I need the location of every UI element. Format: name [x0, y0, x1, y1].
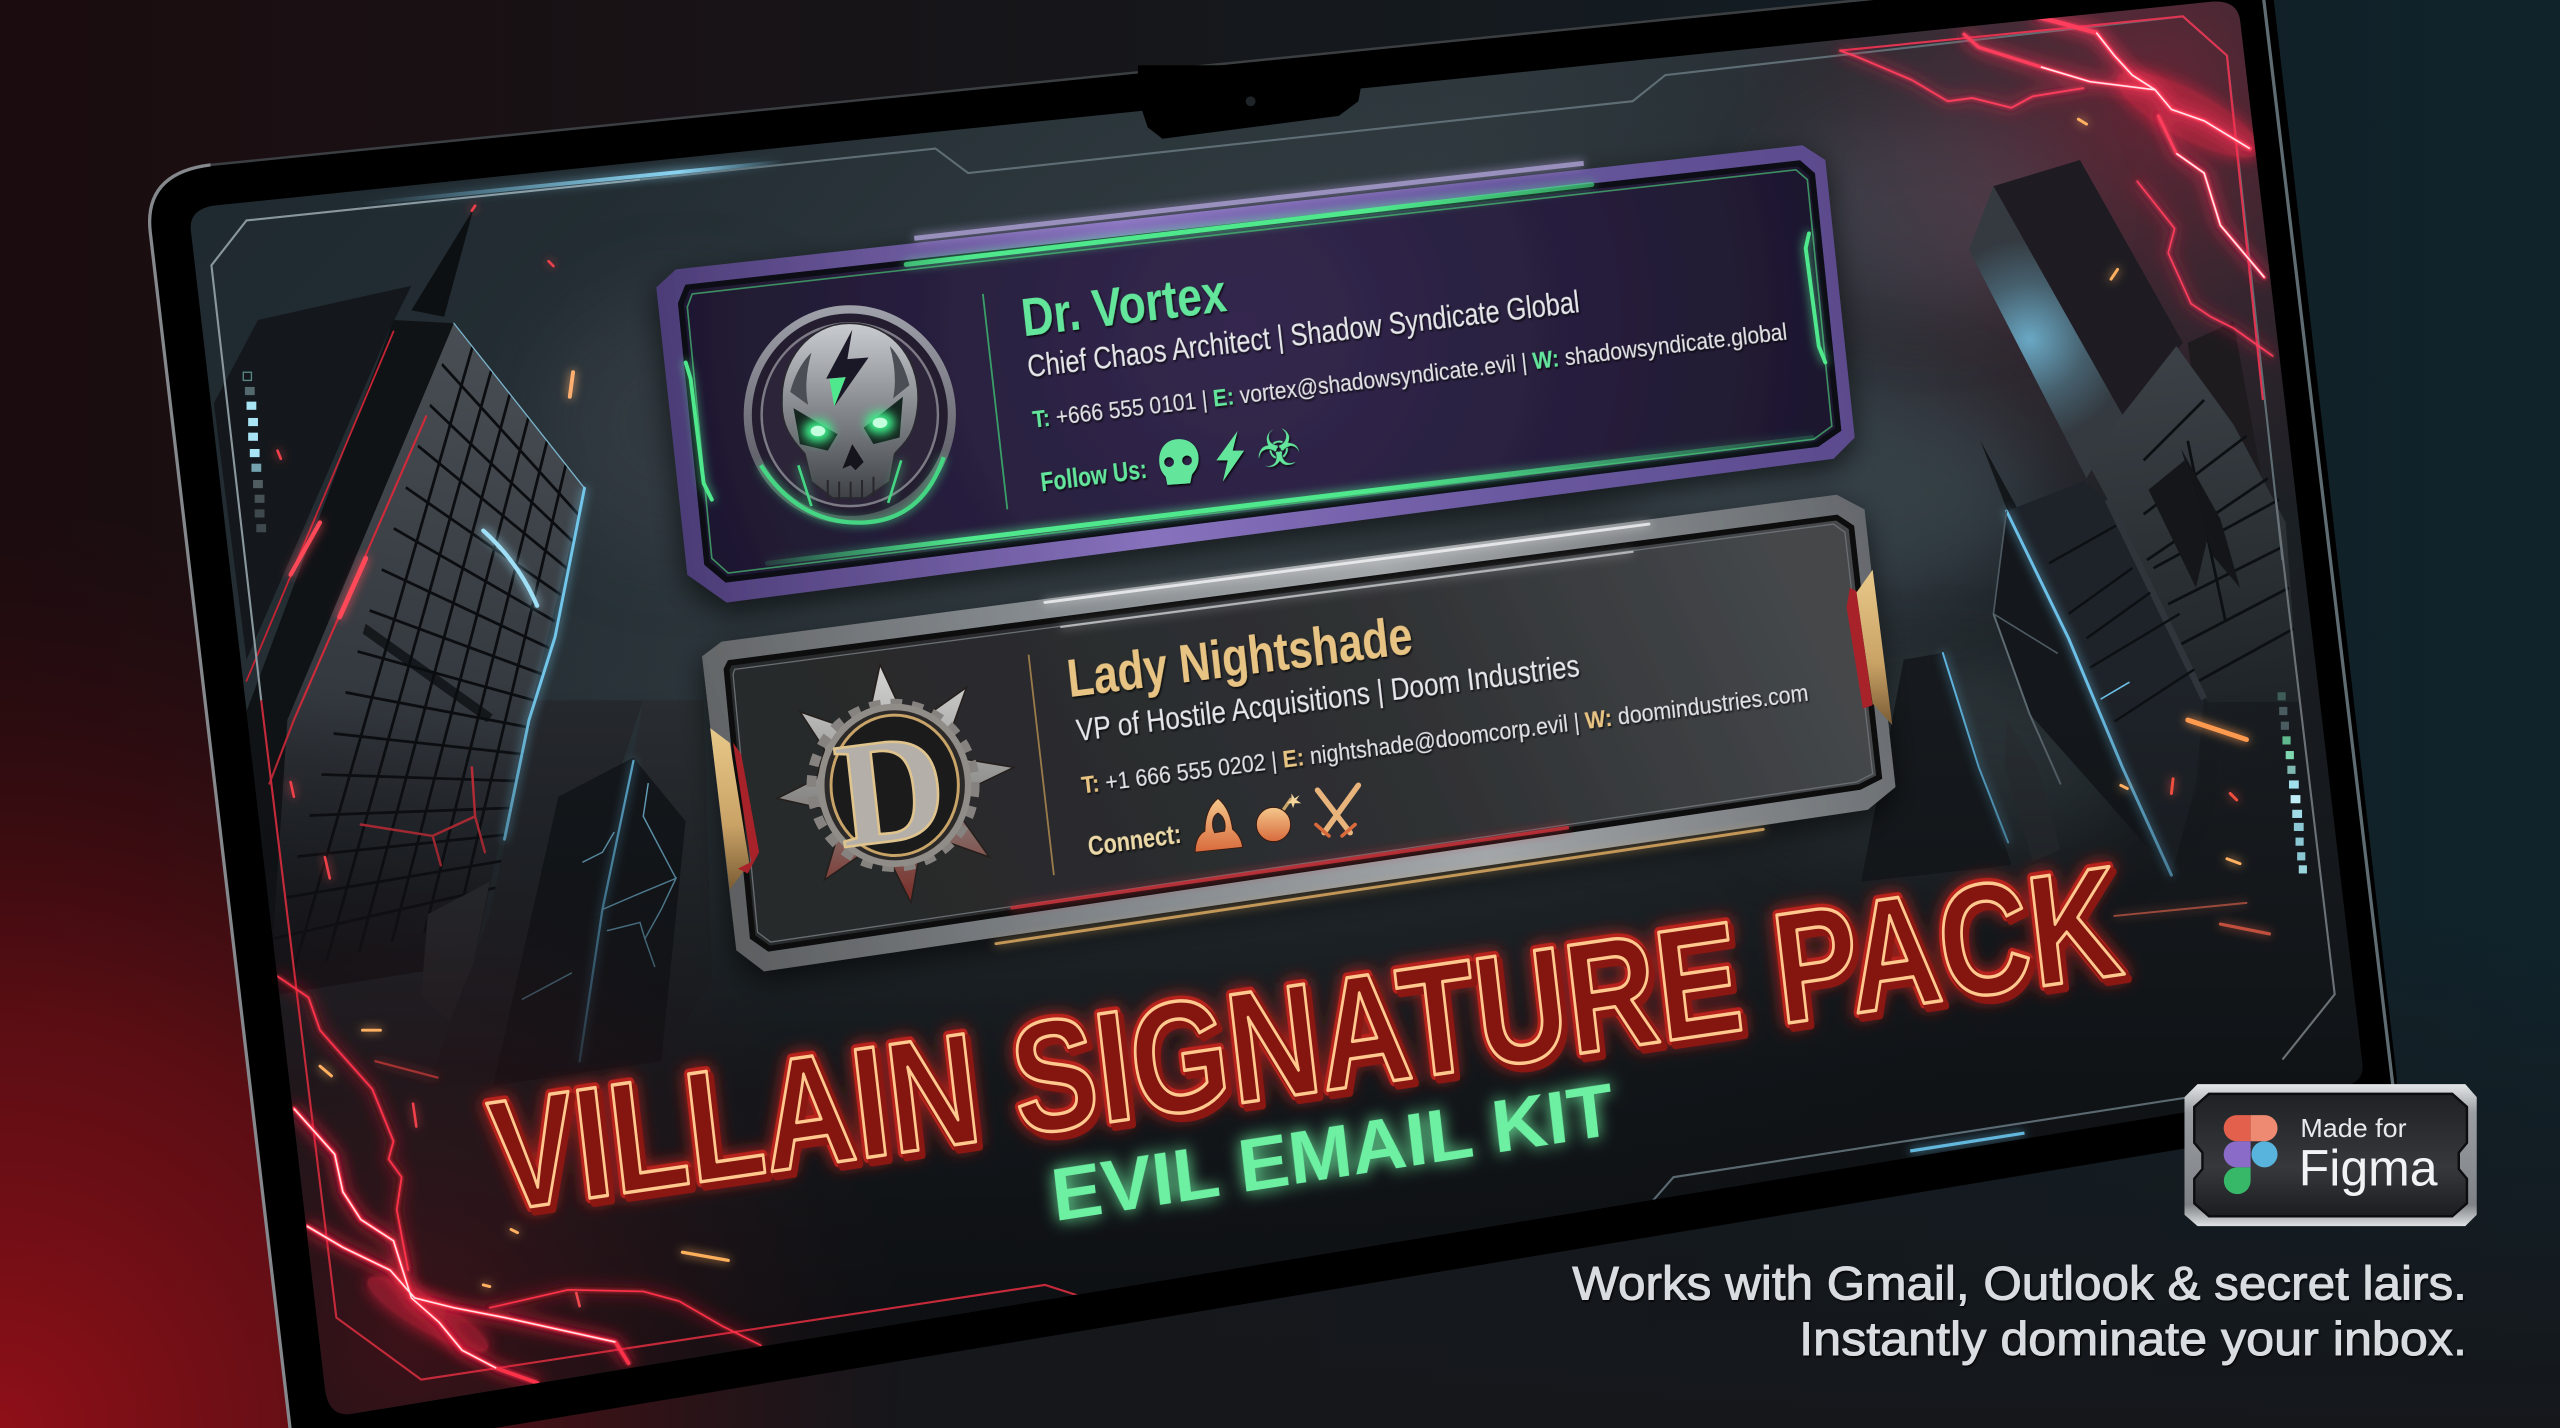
subtitle: EVIL EMAIL KIT: EVIL EMAIL KIT	[1047, 1068, 1618, 1237]
contact line: T: +666 555 0101 | E: vortex@shadowsyndicate.evil | W: shadowsyndicate.global	[1031, 319, 1788, 434]
right skyline buildings	[1861, 160, 2305, 882]
HUD frame lines	[211, 16, 2335, 1380]
tagline line 2: Instantly dominate your inbox.	[1799, 1313, 2467, 1366]
lightning glow patches	[360, 57, 2268, 1363]
tagline	[1572, 1258, 2467, 1366]
contact line: T: +1 666 555 0202 | E: nightshade@doomcorp.evil | W: doomindustries.com	[1080, 680, 1810, 799]
HUD status squares left	[243, 372, 266, 532]
icon: mini skull	[1159, 439, 1199, 485]
lower screen vignette	[163, 653, 2416, 1428]
job title: Chief Chaos Architect | Shadow Syndicate Global	[1026, 284, 1581, 384]
card frame steel	[702, 495, 1896, 971]
icon: Figma logo	[2224, 1115, 2278, 1194]
lightning bottom left core	[294, 1109, 616, 1368]
top lavender glint	[914, 163, 1584, 238]
left skyline buildings	[212, 209, 712, 1086]
vertical divider	[1029, 655, 1054, 875]
title: VILLAIN SIGNATURE PACK: VILLAIN SIGNATURE PACK	[482, 833, 2130, 1245]
panel: Dr. Vortex signature card	[656, 145, 1855, 602]
tagline line 1: Works with Gmail, Outlook & secret lairs.	[1572, 1258, 2467, 1311]
panel: Lady Nightshade signature card	[702, 495, 1896, 971]
ember sparks	[278, 119, 2269, 1306]
gold side ornaments	[710, 570, 1892, 890]
name: Dr. Vortex: Dr. Vortex	[1018, 263, 1229, 348]
left building light edges	[247, 323, 676, 1061]
right building light edges	[1943, 511, 2171, 875]
green neon edges	[686, 184, 1825, 563]
notch and camera	[1138, 65, 1365, 139]
icon: biohazard: ☣	[1253, 416, 1303, 481]
steel top glints	[1045, 524, 1649, 627]
connect label: Connect:	[1086, 818, 1183, 861]
lightning top right core	[2041, 33, 2264, 278]
job title: VP of Hostile Acquisitions | Doom Industries	[1074, 648, 1581, 748]
icon: crossed swords	[1316, 785, 1358, 836]
icon: hooded figure	[1195, 798, 1242, 852]
label: Made for: Made for	[2300, 1113, 2407, 1143]
lightning bottom left	[278, 976, 761, 1383]
name: Lady Nightshade: Lady Nightshade	[1064, 605, 1415, 709]
spiked D emblem: D	[828, 699, 954, 880]
card frame purple	[656, 145, 1855, 602]
red and gold bottom glow	[996, 828, 1763, 944]
title: VILLAIN SIGNATURE PACK: VILLAIN SIGNATURE PACK	[482, 833, 2130, 1245]
title: VILLAIN SIGNATURE PACK: VILLAIN SIGNATURE PACK	[486, 838, 2134, 1250]
badge: Made for Figma	[2184, 1084, 2477, 1226]
follow us label: Follow Us:	[1039, 453, 1148, 497]
vertical divider	[983, 294, 1007, 509]
skull avatar	[744, 305, 956, 524]
icon: lightning bolt	[1216, 431, 1244, 482]
HUD status squares right	[2278, 692, 2307, 873]
lightning top right	[1840, 16, 2273, 356]
label: Figma: Figma	[2299, 1139, 2438, 1196]
spiked D emblem	[777, 664, 1014, 903]
icon: bomb	[1256, 793, 1301, 842]
